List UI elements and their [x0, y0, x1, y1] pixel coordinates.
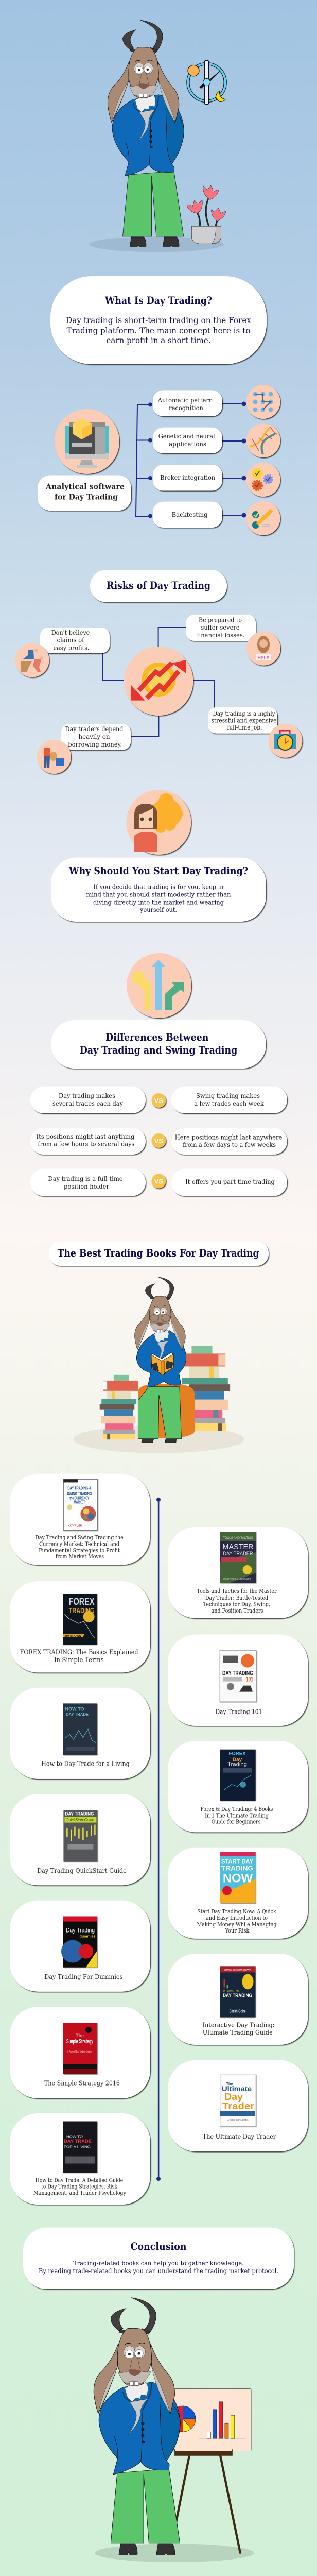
book cover: TRADING — [69, 1606, 95, 1615]
comparison row: trades — [30, 1087, 287, 1113]
book card: day trading and swing trading — [10, 1474, 150, 1565]
glasses — [150, 1314, 170, 1322]
icon: man with help sign — [246, 632, 280, 666]
book card: how to day trade for a living — [10, 1688, 150, 1779]
book cover: 101 — [246, 1676, 253, 1683]
book cover — [220, 1651, 256, 1702]
book cover: SWING TRADING — [67, 1491, 92, 1496]
icon: open book — [151, 1353, 173, 1375]
book cover: Simple Strategy — [66, 2038, 93, 2045]
icon: three direction arrows — [127, 953, 191, 1018]
book card: start day trading now — [168, 1848, 308, 1939]
icon: gears — [242, 463, 280, 497]
comparison row: trades: VS — [154, 1097, 163, 1105]
book cover: TOOLS AND TACTICS — [223, 1537, 253, 1540]
comparison row: trades: several trades each day — [52, 1099, 123, 1107]
icon: risk arrows — [124, 647, 193, 716]
text block: conclusion — [39, 2259, 278, 2275]
book title: from Market Moves — [56, 1553, 104, 1560]
book cover — [63, 2122, 97, 2173]
book cover: JACOB BERNSTEIN — [227, 2119, 249, 2121]
book cover: DAY TRADE — [64, 2139, 92, 2144]
book cover: Oliver Velez & Greg Capra — [223, 1578, 251, 1581]
text block: definition: earn profit in a short time. — [106, 335, 211, 345]
book cover: The — [76, 2033, 84, 2038]
callout: easy profits: claims of — [57, 636, 85, 644]
book cover: Day — [233, 1757, 242, 1763]
comparison row: position length: Here positions might last anywhere — [175, 1133, 282, 1141]
book cover: DAY TRADER — [223, 1551, 253, 1557]
book cover: Videos & Interactive Quizzes — [224, 1969, 251, 1972]
connectors — [103, 628, 214, 737]
book card: day trading 101 — [168, 1634, 308, 1726]
text block: why start: diving directly into the market and wearing — [93, 899, 224, 906]
callout: stressful job: stressful and expensive — [211, 716, 277, 724]
callout: borrowing money: heavily on — [78, 733, 110, 740]
heading panel: differences: Differences Between — [105, 1031, 208, 1043]
book title: Day Trading and Swing Trading the — [35, 1534, 124, 1541]
icon: potted flowers — [187, 185, 226, 244]
book title: Start Day Trading Now: A Quick — [198, 1908, 276, 1915]
text block: definition: Trading platform. The main concept here is to — [67, 326, 250, 335]
icon: software monitor — [55, 409, 119, 474]
book title: Day Trading 101 — [216, 1707, 262, 1716]
book cover: KATHY LIEN — [68, 1524, 82, 1527]
book title — [35, 1534, 124, 1560]
heading panel: risks of day trading: Risks of Day Trading — [107, 580, 210, 591]
book title: In 1 The Ultimate Trading — [205, 1812, 269, 1819]
book card: forex trading basics — [10, 1581, 150, 1672]
comparison row: trades: Day trading makes — [59, 1092, 115, 1099]
book cover: FOREX — [228, 1751, 246, 1757]
book title: How to Day Trade: A Detailed Guide — [36, 2177, 123, 2183]
book cover — [220, 2075, 256, 2126]
book cover: FOREX — [69, 1597, 95, 1607]
comparison row: time commitment — [30, 1169, 287, 1196]
right book stack — [182, 1346, 230, 1431]
book title: and Easy Introduction to — [206, 1914, 268, 1921]
book card: day trading for dummies — [10, 1901, 150, 1992]
callout: borrowing money: borrowing money. — [68, 740, 122, 748]
panel: analytical software diagram — [38, 385, 280, 535]
book title: Interactive Day Trading: — [203, 2022, 275, 2029]
heading panel: differences: Day Trading and Swing Trading — [80, 1044, 238, 1056]
book title: The Ultimate Day Trader — [203, 2132, 276, 2140]
book title: The Simple Strategy 2016 — [44, 2079, 120, 2087]
panel: what is day trading — [50, 276, 267, 364]
book title — [20, 1649, 138, 1664]
callout: stressful job: Day trading is a highly — [213, 709, 275, 717]
timeline axis — [156, 1498, 161, 2181]
callout: financial losses — [186, 615, 256, 641]
heading panel: differences — [51, 1020, 266, 1069]
text block: conclusion: Trading-related books can help you to gather knowledge. — [73, 2259, 244, 2267]
comparison row: position length: from a few days to a few weeks — [183, 1141, 276, 1148]
comparison row: position length: VS — [154, 1137, 163, 1145]
comparison row: time commitment: Day trading is a full-time — [48, 1175, 122, 1182]
label: analytical software — [38, 475, 131, 511]
stool — [138, 1384, 195, 1438]
bar chart — [199, 2402, 245, 2438]
book title: Making Money While Managing — [197, 1921, 277, 1928]
panel: conclusion — [23, 2228, 294, 2289]
callout: borrowing money: Day traders depend — [65, 725, 124, 733]
comparison row: time commitment: VS — [154, 1178, 163, 1185]
callout: financial losses: financial losses. — [197, 631, 245, 639]
item: backtesting: Backtesting — [172, 511, 208, 518]
heading panel: best trading books: The Best Trading Books For Day Trading — [58, 1247, 259, 1259]
item: broker integration — [148, 465, 222, 490]
book cover: dummies — [80, 1935, 95, 1939]
comparison row: position length — [30, 1128, 287, 1155]
pie chart — [170, 2406, 196, 2432]
comparison row: position length: Its positions might last anything — [36, 1132, 135, 1140]
book cover: Day — [224, 2092, 243, 2102]
icon: lender and borrower — [37, 740, 71, 774]
item: automatic pattern recognition: Automatic pattern — [157, 396, 213, 404]
book card: how to day trade guide — [10, 2113, 150, 2205]
item: automatic pattern recognition — [148, 391, 222, 416]
book cover: A Powerful Day Trading Strategy — [67, 2050, 92, 2054]
book cover: DAY TRADING & — [67, 1486, 92, 1490]
book cover — [220, 1966, 255, 2017]
book cover: Day Trading — [66, 1927, 95, 1934]
book title: Management, and Trader Psychology — [33, 2190, 127, 2196]
illustration: goat reading on books — [74, 1277, 244, 1453]
book cover: NOW — [223, 1872, 253, 1886]
icon: climbers at cliff — [15, 643, 49, 677]
item: genetic and neural applications: applications — [169, 440, 206, 448]
callout: stressful job: full-time job. — [227, 723, 262, 731]
book title: Tools and Tactics for the Master — [197, 1588, 277, 1595]
easel chart — [170, 2389, 251, 2553]
book title: Your Risk — [225, 1927, 250, 1934]
item: backtesting — [148, 502, 222, 528]
book title: Ultimate Trading Guide — [203, 2029, 273, 2036]
book cover — [63, 1810, 97, 1862]
book title: Day Trading For Dummies — [44, 1973, 122, 1980]
text block: why start — [86, 883, 231, 913]
book title: Day Trading QuickStart Guide — [37, 1867, 127, 1874]
illustration: goat mascot with clock and plant — [90, 20, 226, 252]
text block: why start: mind that you should start modestly rather than — [86, 890, 231, 899]
book cover: HOW TO — [66, 2134, 83, 2139]
book cover: FOR A LIVING — [64, 2145, 91, 2149]
book cover — [63, 1594, 97, 1645]
icon: briefcase clock — [268, 724, 302, 758]
comparison row: trades: a few trades each week — [194, 1099, 264, 1107]
text block: why start: If you decide that trading is for you, keep in — [94, 883, 224, 890]
book cover: Trading — [227, 1762, 247, 1768]
book title: FOREX TRADING: The Basics Explained — [20, 1649, 138, 1656]
book cover: DAY TRADING — [222, 1670, 253, 1677]
callout: easy profits — [40, 628, 110, 653]
book cover — [220, 1532, 256, 1583]
book title: and Position Traders — [211, 1607, 263, 1614]
book cover: Satish Gaire — [230, 2009, 246, 2013]
comparison row: time commitment: position holder — [64, 1182, 109, 1190]
book title — [197, 1908, 277, 1934]
label: analytical software: Analytical software — [45, 482, 125, 492]
book cover — [63, 1479, 97, 1530]
book card: forex and day trading — [168, 1741, 308, 1832]
book cover — [63, 2023, 97, 2074]
icon: man with help sign: HELP — [257, 655, 270, 660]
book title: to Day Trading Strategies, Risk — [41, 2183, 117, 2190]
item: automatic pattern recognition: recognition — [169, 404, 203, 412]
book title: Day Trader: Battle-Tested — [205, 1595, 268, 1601]
heading: what is day trading: What Is Day Trading? — [104, 295, 212, 307]
callout: easy profits: Don't believe — [51, 629, 90, 636]
book title: Fundamental Strategies to Profit — [39, 1547, 120, 1554]
book cover: MARKET — [74, 1500, 85, 1504]
panel: risks diagram — [15, 615, 302, 774]
book cover: JIM BROWN — [65, 1635, 81, 1638]
item: genetic and neural applications — [148, 428, 222, 453]
book cover: Trader — [222, 2101, 254, 2111]
book cover: DAY TRADING — [65, 1812, 94, 1817]
book title: in Simple Terms — [55, 1656, 104, 1664]
comparison row: position length: from a few hours to several days — [38, 1140, 134, 1148]
heading panel: risks of day trading — [90, 570, 227, 602]
text block: definition — [66, 315, 251, 345]
book cover: Ultimate — [222, 2084, 252, 2093]
book title: Forex & Day Trading: 4 Books — [201, 1806, 273, 1812]
illustration: goat with chart easel — [94, 2298, 254, 2562]
book cover — [63, 1703, 97, 1755]
item: broker integration: Broker integration — [160, 473, 215, 481]
book card: the ultimate day trader — [168, 2060, 308, 2151]
text block: conclusion: By reading trade-related books you can understand the trading market protocol. — [39, 2267, 278, 2275]
left book stack — [100, 1375, 138, 1439]
book cover — [220, 1750, 256, 1801]
icon: pattern dots — [242, 385, 280, 419]
text block: why start: yourself out. — [139, 906, 177, 913]
callout: financial losses: Be prepared to — [199, 616, 242, 623]
book title — [201, 1806, 273, 1825]
book cover: TRADING — [221, 1865, 253, 1872]
book title — [203, 2022, 275, 2036]
book card: tools and tactics — [168, 1527, 308, 1618]
book title — [33, 2177, 127, 2196]
item: genetic and neural applications: Genetic and neural — [158, 432, 215, 440]
callout: borrowing money — [61, 724, 131, 750]
book cover: DAY TRADE — [66, 1711, 89, 1717]
label: analytical software: for Day Trading — [55, 493, 118, 502]
icon: checklist and pencil — [242, 501, 280, 535]
book title: Techniques for Day, Swing, — [203, 1601, 270, 1607]
connector tree — [136, 404, 244, 516]
book card: interactive day trading — [168, 1954, 308, 2045]
callout: easy profits: easy profits. — [54, 644, 90, 651]
comparison row: trades: Swing trading makes — [196, 1092, 260, 1099]
book card: the simple strategy — [10, 2007, 150, 2098]
icon: day and night clock — [188, 60, 225, 105]
book cover: HOW TO — [65, 1706, 84, 1711]
book cover: DAY TRADING — [223, 1993, 252, 1998]
book cover — [220, 1852, 256, 1903]
panel: why should you start day trading — [51, 858, 266, 922]
callout: stressful job — [208, 707, 277, 734]
trousers and hooves — [136, 1331, 186, 1443]
book title: Currency Market: Technical and — [39, 1540, 119, 1548]
callout: financial losses: suffer severe — [201, 623, 240, 631]
book title — [197, 1588, 277, 1614]
heading panel: best trading books — [49, 1242, 269, 1266]
book cover: START DAY — [221, 1858, 253, 1866]
book cover — [61, 1917, 97, 1968]
book cover: the CURRENCY — [69, 1496, 90, 1500]
book title: How to Day Trade for a Living — [41, 1760, 130, 1767]
heading: conclusion: Conclusion — [131, 2241, 186, 2252]
book cover: MASTER — [222, 1543, 254, 1551]
heading: why start: Why Should You Start Day Trading? — [68, 865, 248, 877]
book title: Guide for Beginners. — [212, 1819, 262, 1825]
book cover: QuickStart Guide — [66, 1818, 94, 1822]
book cover: The — [226, 2082, 233, 2086]
icon: thinking woman — [126, 790, 191, 855]
book cover: INTERACTIVE — [223, 1990, 240, 1993]
comparison row: time commitment: It offers you part-time trading — [185, 1178, 275, 1185]
book card: quickstart guide — [10, 1794, 150, 1885]
text block: definition: Day trading is short-term trading on the Forex — [66, 315, 251, 325]
icon: dna helix — [242, 423, 280, 457]
